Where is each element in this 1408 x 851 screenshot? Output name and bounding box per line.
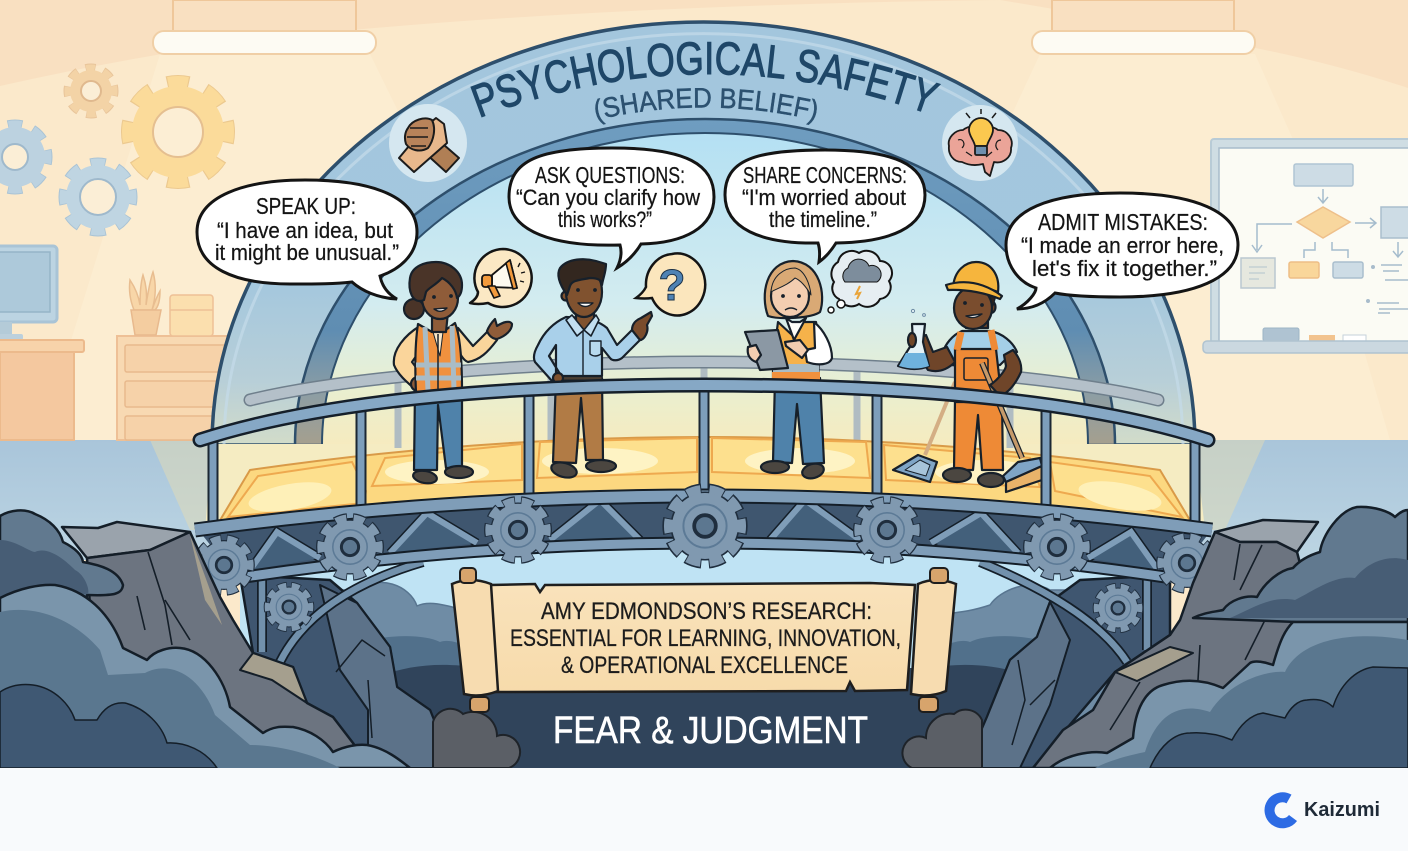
flask xyxy=(898,324,929,369)
cabinet with plant and box xyxy=(117,272,242,440)
icon: worried thought cloud xyxy=(828,251,892,313)
left cliff and clouds xyxy=(0,510,410,768)
scroll: research callout xyxy=(452,568,956,712)
truss chords xyxy=(195,496,1212,530)
character: worker with flask and broom xyxy=(893,262,1042,492)
lower arch and side struts xyxy=(262,562,1147,662)
icon: megaphone bubble xyxy=(470,249,532,307)
speech bubble: admit mistakes xyxy=(1006,193,1238,309)
icon: question bubble xyxy=(636,253,705,315)
right scroll roll xyxy=(911,580,956,695)
speech bubble: admit mistakes: let's fix it together.” xyxy=(1032,256,1217,281)
gear: blue right xyxy=(66,165,130,229)
title: psychological safety: PSYCHOLOGICAL SAFETY xyxy=(470,42,941,118)
scroll text xyxy=(510,598,901,679)
scroll text: & OPERATIONAL EXCELLENCE xyxy=(561,652,848,679)
floor xyxy=(0,440,1408,560)
main cloud xyxy=(0,585,410,768)
dome arch: psychological safety band xyxy=(205,22,1205,530)
chasm sky xyxy=(240,530,1170,768)
back guard rail xyxy=(250,362,1158,448)
logo: Kaizumi xyxy=(1270,797,1380,823)
footer strip xyxy=(0,768,1408,851)
truss diagonals xyxy=(250,500,1158,570)
ceiling lamp left xyxy=(153,0,376,54)
scroll text: ESSENTIAL FOR LEARNING, INNOVATION, xyxy=(510,625,901,652)
right cliff and clouds xyxy=(1033,507,1408,768)
subtitle: shared belief: (SHARED BELIEF) xyxy=(595,88,817,125)
cliff face xyxy=(1033,532,1320,768)
smoke clouds at chasm base xyxy=(433,709,982,768)
speech bubble: share concerns xyxy=(725,150,925,262)
gear: blue left xyxy=(0,127,45,187)
speech bubble: speak up: it might be unusual.” xyxy=(215,240,399,265)
inner rock right xyxy=(965,575,1170,768)
lower dark cloud xyxy=(1150,667,1408,768)
broom handle xyxy=(982,363,1022,458)
icon: handshake xyxy=(389,104,467,182)
speech bubble: speak up: SPEAK UP: xyxy=(256,193,356,219)
speech bubble: ask questions xyxy=(509,148,714,268)
speech bubble: share concerns: SHARE CONCERNS: xyxy=(743,162,907,188)
character: woman with tablet xyxy=(745,261,832,481)
logo: Kaizumi: Kaizumi xyxy=(1304,798,1380,821)
gear: yellow xyxy=(132,86,224,178)
glowing deck floor xyxy=(216,437,1194,527)
inner ring xyxy=(295,119,1115,445)
speech bubble: speak up: “I have an idea, but xyxy=(217,218,393,243)
icon: question bubble: ? xyxy=(659,261,685,310)
main cloud xyxy=(1050,622,1408,768)
label: fear and judgment: FEAR & JUDGMENT xyxy=(553,710,868,752)
lower dark cloud xyxy=(0,685,217,768)
wall gears xyxy=(0,69,224,229)
ceiling lamp right xyxy=(1032,0,1255,54)
speech bubble: share concerns: the timeline.” xyxy=(769,207,877,232)
speech bubble: ask questions: ASK QUESTIONS: xyxy=(535,162,685,188)
gear: tan xyxy=(69,69,113,113)
cliff ledge xyxy=(1215,520,1318,552)
upper dark cloud xyxy=(0,510,123,768)
sky inside the dome xyxy=(322,133,1088,445)
desk with monitor xyxy=(0,246,84,440)
left scroll roll xyxy=(452,580,498,695)
icon: brain with light bulb xyxy=(942,105,1018,181)
logo mark xyxy=(1270,797,1293,823)
cliff face xyxy=(87,532,370,768)
speech bubble: speak up xyxy=(197,180,417,299)
character: woman in orange vest xyxy=(394,262,512,485)
inner rock left xyxy=(240,575,453,768)
front guard rail with posts xyxy=(200,385,1208,528)
character: man in blue shirt xyxy=(534,259,652,480)
speech bubble: admit mistakes: “I made an error here, xyxy=(1021,233,1224,258)
speech bubble: admit mistakes: ADMIT MISTAKES: xyxy=(1038,209,1208,235)
distant clouds in chasm xyxy=(270,582,1140,768)
cliff ledge xyxy=(62,522,190,558)
speech bubble: ask questions: “Can you clarify how xyxy=(516,185,700,210)
speech bubble: ask questions: this works?” xyxy=(558,207,652,232)
deck panels xyxy=(228,462,366,517)
speech bubble: share concerns: “I'm worried about xyxy=(742,185,906,210)
bridge truss xyxy=(195,496,1212,662)
upper dark cloud xyxy=(1193,507,1408,622)
base glow under the dome xyxy=(205,444,1205,530)
bridge gears xyxy=(199,491,1212,628)
scroll text: AMY EDMONDSON’S RESEARCH: xyxy=(541,598,872,625)
whiteboard with flowchart xyxy=(1203,139,1408,353)
dustpan xyxy=(893,455,937,482)
